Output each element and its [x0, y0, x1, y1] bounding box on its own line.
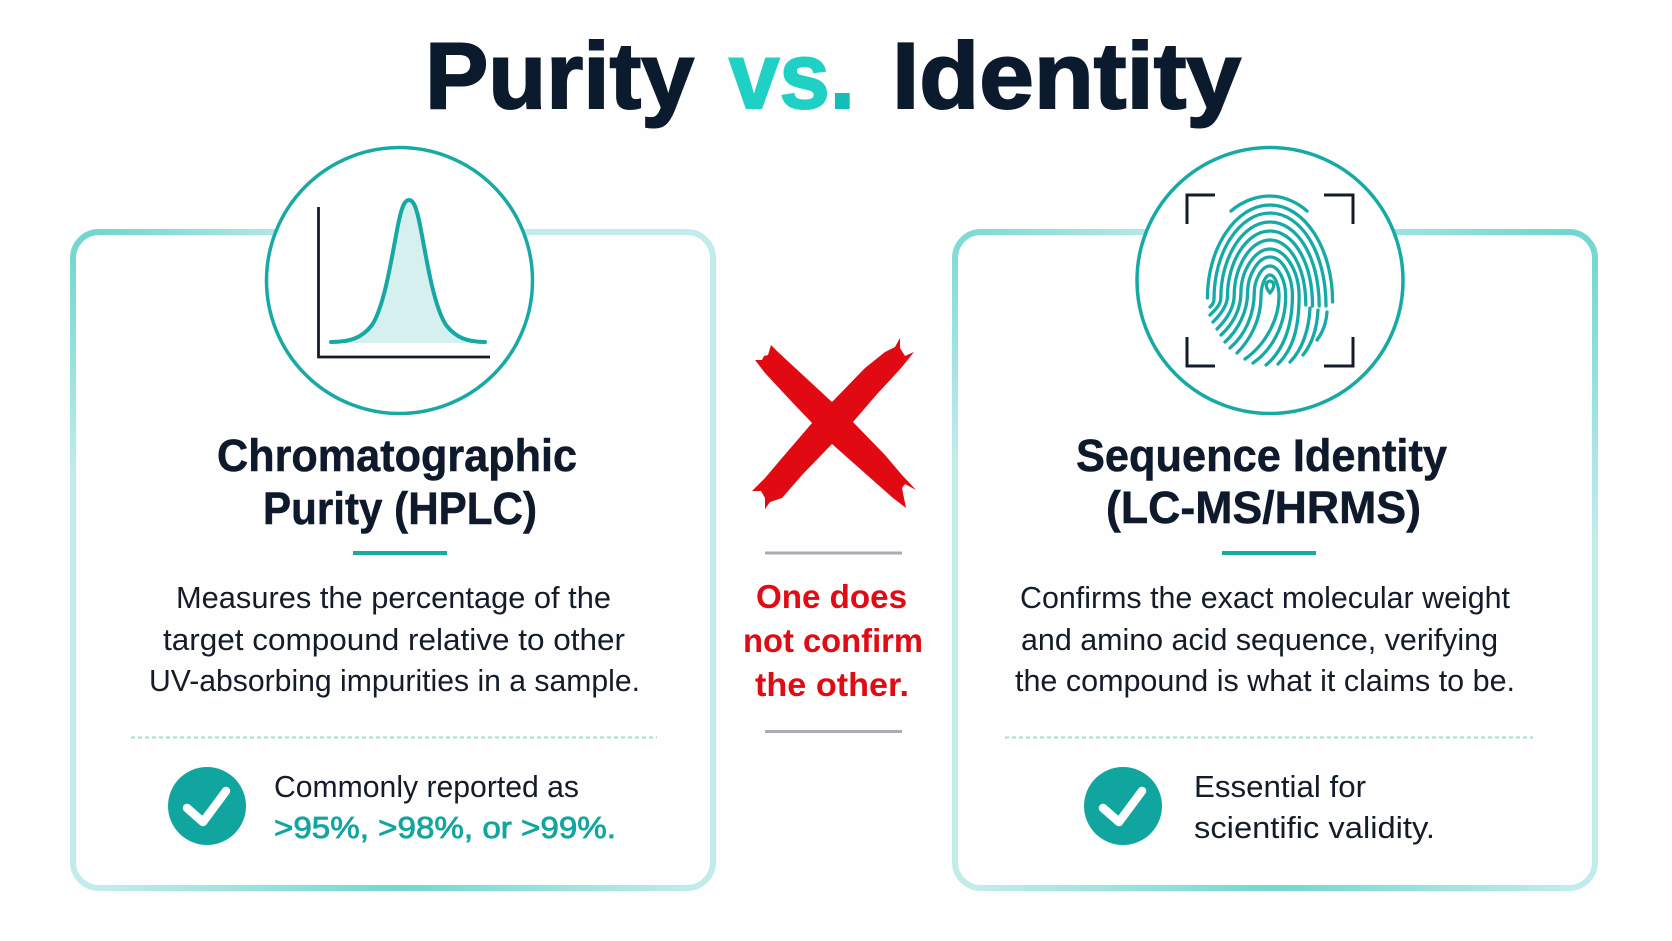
card border: left: [73, 232, 713, 888]
heading: chromatographic purity: [217, 430, 577, 534]
description text: the compound is what it claims to be.: [1015, 663, 1515, 698]
icon: red brush X: [752, 338, 916, 509]
message text: One does: [756, 578, 907, 615]
fingerprint ridges: [1207, 196, 1333, 365]
description text: and amino acid sequence, verifying: [1021, 622, 1498, 657]
icon: check badge: [1084, 767, 1162, 845]
description text: target compound relative to other: [163, 622, 625, 657]
heading: chromatographic purity: Purity (HPLC): [263, 483, 537, 534]
note: commonly reported: [274, 769, 616, 845]
heading: sequence identity: [1076, 430, 1447, 533]
title: vs.: [729, 23, 855, 128]
message text: the other.: [755, 666, 909, 703]
icon: chromatogram peak in circle: [266, 148, 532, 414]
note: essential for validity: [1194, 769, 1435, 845]
center: red X and message: [743, 338, 923, 732]
title: Identity: [892, 23, 1241, 128]
description text: Measures the percentage of the: [176, 580, 611, 615]
panel: sequence identity: [955, 148, 1595, 888]
heading: chromatographic purity: Chromatographic: [217, 430, 577, 481]
panel: chromatographic purity: [73, 148, 713, 888]
message text: [743, 578, 923, 703]
message text: not confirm: [743, 622, 923, 659]
heading accent rule: [1222, 551, 1316, 555]
note: essential for validity: Essential for: [1194, 769, 1366, 804]
heading accent rule: [353, 551, 447, 555]
heading: sequence identity: Sequence Identity: [1076, 430, 1447, 481]
note: commonly reported: Commonly reported as: [274, 769, 579, 804]
description text: Confirms the exact molecular weight: [1020, 580, 1510, 615]
scan brackets: [1187, 195, 1353, 366]
description text: [1015, 580, 1515, 698]
title: [425, 23, 1241, 128]
note: commonly reported: >95%, >98%, or >99%.: [274, 810, 616, 845]
heading: sequence identity: (LC-MS/HRMS): [1106, 482, 1421, 533]
description text: [149, 580, 640, 698]
description text: UV-absorbing impurities in a sample.: [149, 663, 640, 698]
icon: check badge: [168, 767, 246, 845]
title: Purity: [425, 23, 694, 128]
note: essential for validity: scientific validity.: [1194, 810, 1435, 845]
card border: right: [955, 232, 1595, 888]
icon: fingerprint in circle: [1137, 148, 1403, 414]
